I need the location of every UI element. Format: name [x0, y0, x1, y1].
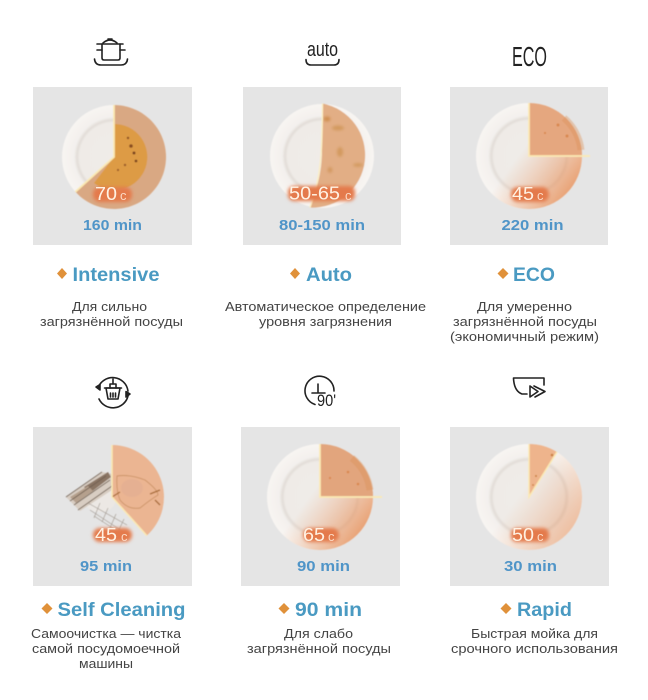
temperature badge: 45: [95, 525, 117, 545]
icon: self cleaning: [96, 378, 130, 408]
temperature badge: [511, 525, 549, 545]
text: Auto description: уровня загрязнения: [259, 315, 392, 329]
text: Self Cleaning description: [31, 627, 181, 671]
text: Self Cleaning description: самой посудомоечной: [32, 642, 180, 656]
temperature badge: [93, 525, 132, 545]
temperature badge: [93, 184, 132, 204]
panel: Rapid: [450, 427, 609, 586]
title: Rapid: Rapid: [517, 600, 572, 621]
duration: 80-150 min: [279, 217, 365, 234]
text: 90 min description: Для слабо: [284, 627, 353, 641]
panel: ECO: [450, 87, 608, 245]
plate: [62, 105, 166, 209]
plate: [267, 444, 382, 550]
icon: auto: auto: [307, 39, 338, 61]
dish rack illustration: [66, 472, 127, 532]
text: Auto description: [225, 300, 426, 329]
duration: 220 min: [502, 217, 564, 234]
icon: rapid: [514, 378, 545, 397]
text: Self Cleaning description: Самоочистка — чистка: [31, 627, 181, 641]
panel: Intensive: [33, 87, 192, 245]
duration: 30 min: [504, 558, 557, 575]
text: Rapid description: срочного использования: [451, 642, 618, 656]
text: ECO description: [450, 300, 599, 344]
temperature badge: [288, 184, 355, 204]
title: Intensive: Intensive: [72, 265, 160, 286]
duration: 160 min: [83, 217, 142, 234]
title: Auto: Auto: [306, 265, 352, 286]
text: ECO description: загрязнённой посуды: [453, 315, 597, 329]
temperature badge: [511, 184, 549, 204]
cleaned wedge: [112, 445, 164, 536]
temperature badge: [303, 525, 339, 545]
panel: Self Cleaning: [33, 427, 192, 586]
icon: auto: [306, 39, 339, 65]
text: ECO description: (экономичный режим): [450, 330, 599, 344]
icon: pot on tray: [94, 39, 128, 65]
plate: [270, 104, 374, 208]
icon: ECO: ECO: [512, 41, 547, 72]
plate: [476, 444, 582, 550]
text: Intensive description: Для сильно: [72, 300, 147, 314]
text: 90 min description: [247, 627, 391, 656]
panel: 90 min: [241, 427, 400, 586]
temperature badge: c: [121, 529, 128, 544]
temperature badge: c: [328, 529, 335, 544]
title: 90 min: 90 min: [295, 600, 362, 621]
icon: 90 minute clock: 90': [317, 391, 336, 410]
temperature badge: 50-65: [289, 184, 340, 204]
plate: [476, 103, 590, 209]
temperature badge: c: [537, 529, 544, 544]
temperature badge: 70: [95, 184, 117, 204]
text: Rapid description: Быстрая мойка для: [471, 627, 598, 641]
temperature badge: c: [120, 188, 127, 203]
duration: 90 min: [297, 558, 350, 575]
icon: 90 minute clock: [305, 376, 336, 410]
duration: 95 min: [80, 558, 132, 575]
text: Auto description: Автоматическое определение: [225, 300, 426, 314]
text: Intensive description: [40, 300, 183, 329]
panel: Auto: [243, 87, 401, 245]
temperature badge: c: [345, 188, 352, 203]
title: Auto: [290, 265, 352, 286]
text: 90 min description: загрязнённой посуды: [247, 642, 391, 656]
text: Self Cleaning description: машины: [79, 657, 133, 671]
temperature badge: 65: [303, 525, 325, 545]
text: ECO description: Для умеренно: [477, 300, 572, 314]
temperature badge: 45: [512, 184, 534, 204]
temperature badge: c: [537, 188, 544, 203]
title: Self Cleaning: Self Cleaning: [58, 600, 186, 621]
temperature badge: 50: [512, 525, 534, 545]
title: ECO: ECO: [513, 265, 555, 286]
text: Rapid description: [451, 627, 618, 656]
text: Intensive description: загрязнённой посуды: [40, 315, 183, 329]
